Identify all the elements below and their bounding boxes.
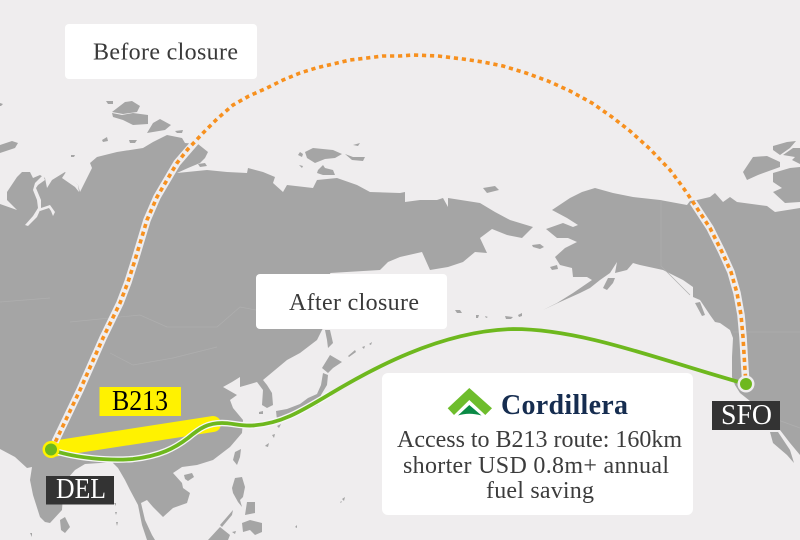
island group: Russian Arctic [0, 101, 365, 175]
label: After closure [256, 274, 447, 329]
label: Before closure [65, 24, 257, 79]
island group: Baja and Vancouver [695, 302, 794, 463]
green line [52, 329, 746, 460]
gulf of Ob [25, 175, 45, 226]
island group: Sri Lanka and Andaman [30, 503, 118, 537]
gulfs cut into the coast [25, 172, 79, 226]
callout panel: Cordillera [382, 373, 693, 515]
light casing over land [55, 133, 746, 442]
label: After closure: After closure [289, 290, 419, 316]
country borders [0, 200, 800, 428]
SFO marker [738, 376, 754, 392]
Taz estuary [38, 205, 55, 216]
label: B213: B213 [112, 386, 168, 417]
DEL marker [42, 441, 60, 458]
island group: Taiwan, Hainan, Ryukyu [184, 424, 281, 481]
Yenisei gulf [62, 172, 79, 192]
icon: Cordillera logo [448, 388, 492, 416]
route before closure [52, 55, 746, 449]
landmass: Eurasia [0, 135, 533, 540]
island group: Canadian Arctic [743, 141, 800, 203]
label: DEL: DEL [56, 474, 106, 505]
Cordillera wordmark: Cordillera [501, 390, 628, 421]
label: SFO: SFO [721, 400, 772, 431]
callout text: shorter USD 0.8m+ annual [403, 453, 669, 479]
route after closure [52, 329, 746, 460]
island group: Japan and Sakhalin [259, 330, 372, 421]
callout text [397, 427, 682, 504]
label: Before closure: Before closure [93, 40, 238, 66]
B213 corridor highlight [52, 424, 213, 449]
white casing [52, 394, 330, 460]
island group: Philippines and Borneo [208, 477, 345, 540]
orange dotted line [52, 55, 746, 449]
callout text: Access to B213 route: 160km [397, 427, 682, 453]
island group: Alaska and Bering [455, 186, 615, 319]
callout text: fuel saving [486, 478, 594, 504]
landmass: North America [543, 188, 800, 455]
